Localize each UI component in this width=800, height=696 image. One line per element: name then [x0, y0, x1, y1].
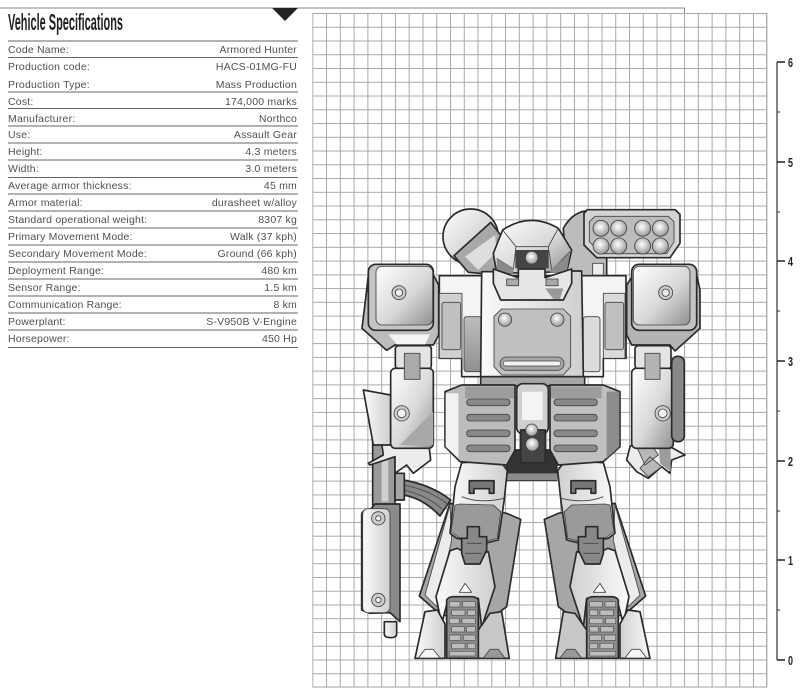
- panel: specifications table: Horsepower:: [8, 333, 70, 345]
- height scale: 2: [788, 454, 793, 469]
- panel: specifications table: 4.3 meters: [245, 146, 297, 158]
- left hand gripping rifle: [368, 438, 431, 473]
- panel: specifications table: 8307 kg: [258, 214, 297, 226]
- launcher: [584, 210, 680, 275]
- panel: specifications table: Northco: [259, 113, 297, 125]
- panel: specifications table: Powerplant:: [8, 316, 66, 328]
- panel: specifications table: 1.5 km: [264, 282, 297, 294]
- height scale: 6: [788, 55, 793, 70]
- panel: specifications table: Sensor Range:: [8, 282, 81, 294]
- panel: specifications table: Average armor thickness:: [8, 180, 132, 192]
- rear launcher mount: [563, 211, 607, 277]
- panel: specifications table: Walk (37 kph): [230, 231, 297, 243]
- height scale: 4: [788, 254, 794, 269]
- panel: specifications table: durasheet w/alloy: [212, 197, 298, 209]
- chest plate: [494, 309, 571, 375]
- panel: specifications table: Communication Range:: [8, 299, 122, 311]
- text: Vehicle Specifications: [8, 9, 123, 35]
- panel: specifications table: 3.0 meters: [245, 163, 297, 175]
- height scale: [777, 55, 794, 668]
- left arm: [363, 346, 433, 448]
- panel: specifications table: Secondary Movement Mode:: [8, 248, 147, 260]
- pelvis: [507, 450, 557, 480]
- illustration: armored robot: [362, 209, 700, 658]
- left hip armor: [445, 385, 515, 465]
- panel: specifications table: [8, 41, 298, 348]
- panel: specifications table: Code Name:: [8, 44, 69, 56]
- right shoulder pad: [627, 264, 700, 351]
- height scale: 0: [788, 653, 793, 668]
- head: [493, 220, 572, 273]
- panel: specifications table: Armored Hunter: [220, 44, 297, 56]
- center groin armor: [517, 384, 548, 463]
- panel: specifications table: Height:: [8, 146, 43, 158]
- height scale: 1: [788, 553, 793, 568]
- panel: specifications table: Assault Gear: [234, 129, 297, 141]
- panel: specifications table: Armor material:: [8, 197, 83, 209]
- panel: specifications table: 174,000 marks: [225, 96, 297, 108]
- robot lower body: legs, pelvis, weapon: [362, 427, 685, 658]
- panel: specifications table: Manufacturer:: [8, 113, 75, 125]
- height scale: 3: [788, 354, 793, 369]
- panel: specifications table: Production code:: [8, 61, 90, 73]
- panel: specifications table: Use:: [8, 129, 30, 141]
- left shoulder pad: [362, 264, 439, 350]
- weapon: rifle: [362, 427, 451, 638]
- arm connectors and shoulder bar: [439, 276, 626, 377]
- panel: specifications table: 8 km: [273, 299, 297, 311]
- panel: specifications table: Cost:: [8, 96, 34, 108]
- height scale: 5: [788, 155, 793, 170]
- icon: tab triangle: [272, 8, 298, 21]
- panel: specifications table: Ground (66 kph): [218, 248, 297, 260]
- panel: specifications table: 480 km: [261, 265, 297, 277]
- panel: specifications table: 45 mm: [264, 180, 297, 192]
- panel: specifications table: 450 Hp: [262, 333, 297, 345]
- right hip armor: [550, 385, 620, 465]
- shoulder dome: [443, 209, 501, 274]
- panel: specifications table: HACS-01MG-FU: [216, 61, 297, 73]
- robot upper body: head, torso, arms, launcher: [362, 209, 700, 465]
- panel: specifications table: Mass Production: [216, 79, 297, 91]
- panel: specifications table: Production Type:: [8, 79, 90, 91]
- chest: [481, 269, 583, 377]
- right hand with spikes: [627, 437, 685, 478]
- panel: specifications table: Standard operational weight:: [8, 214, 147, 226]
- panel: specifications table: Deployment Range:: [8, 265, 104, 277]
- waist band: [481, 377, 585, 386]
- left leg: [415, 461, 521, 658]
- panel: specifications table: Primary Movement Mode:: [8, 231, 133, 243]
- panel: specifications table: S-V950B V-Engine: [206, 316, 297, 328]
- right leg: [544, 461, 650, 658]
- right arm: [632, 346, 684, 448]
- panel: specifications table: Width:: [8, 163, 39, 175]
